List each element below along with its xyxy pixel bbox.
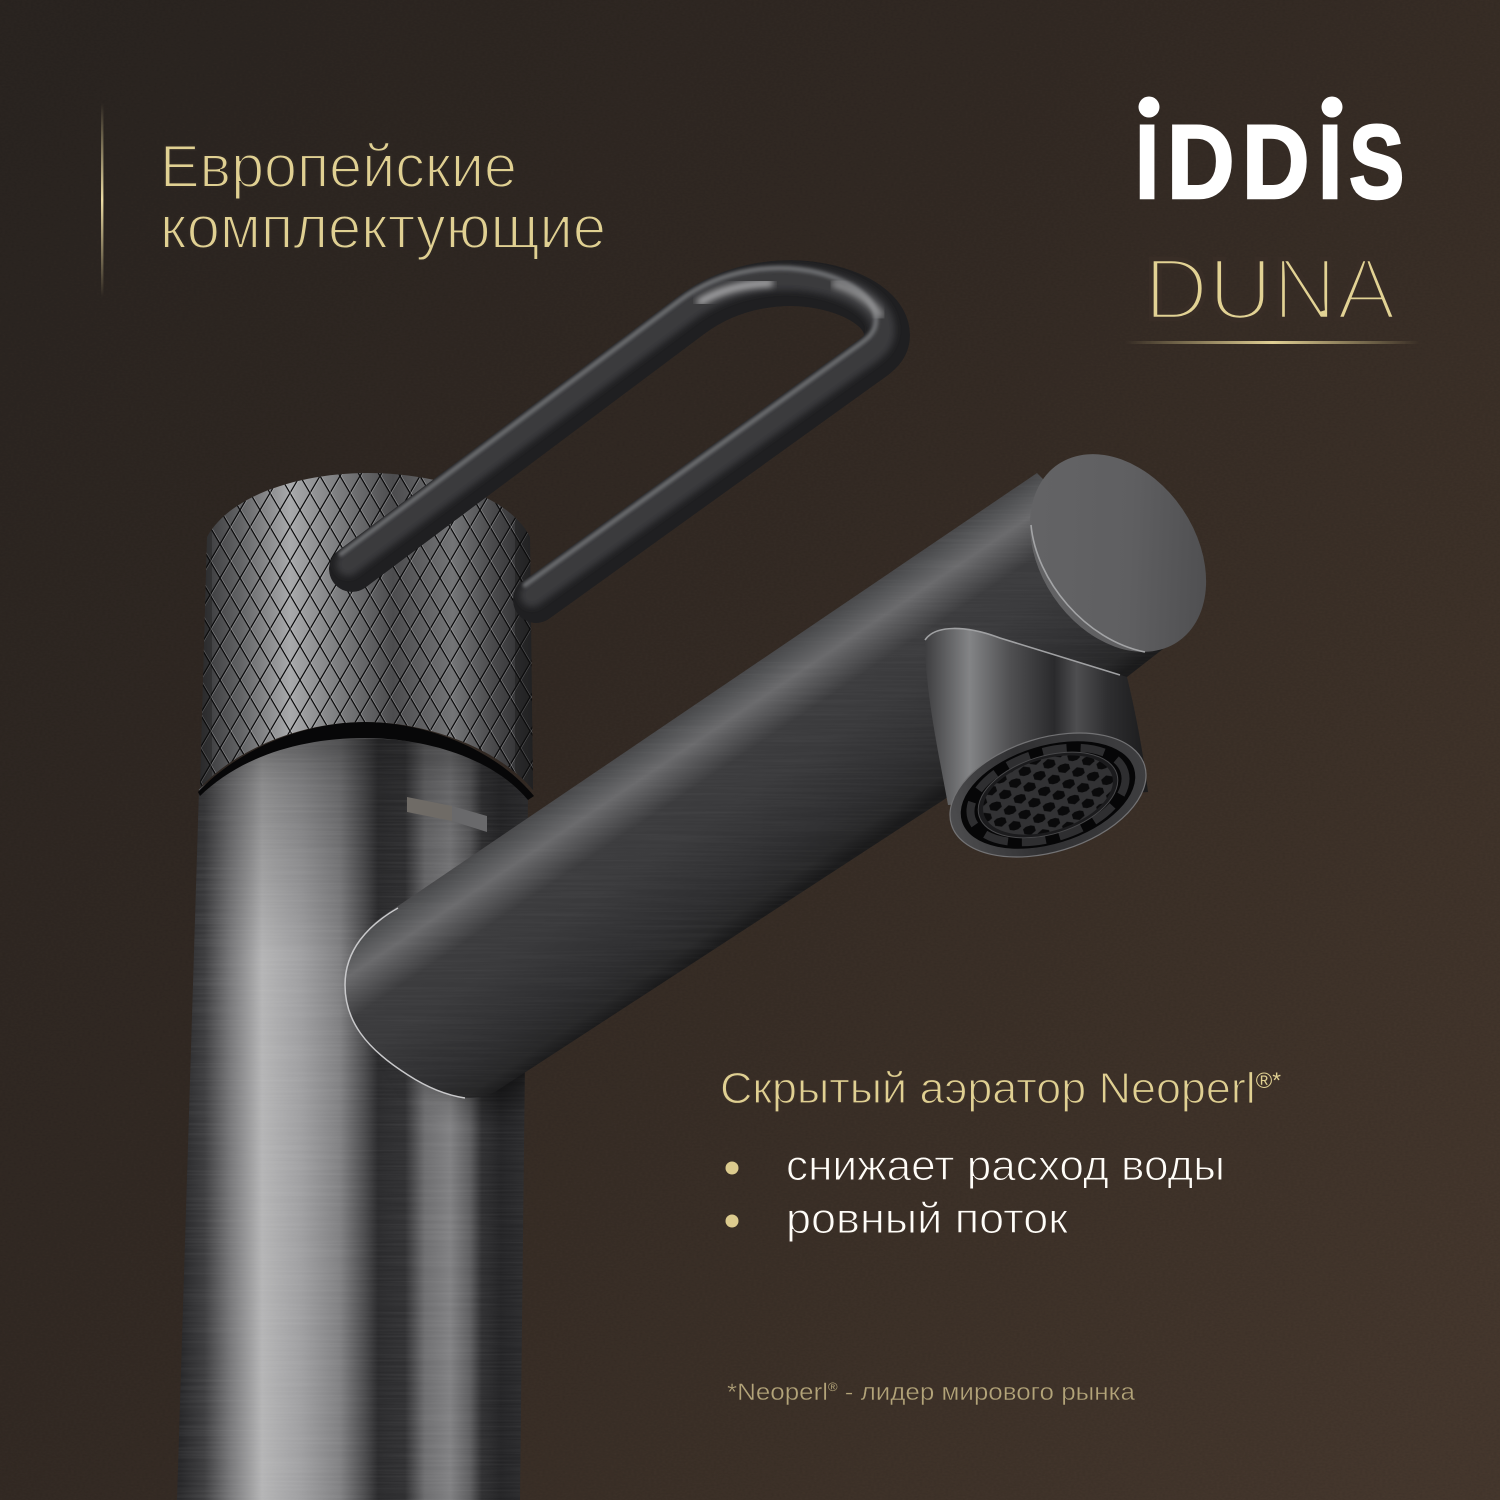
faucet body column bbox=[177, 738, 528, 1500]
footnote: *Neoperl bbox=[727, 1379, 820, 1406]
bullet item: even flow: ровный поток bbox=[786, 1195, 1069, 1243]
aerator rim bbox=[935, 711, 1161, 879]
bullet item: reduces water use: снижает расход воды bbox=[786, 1142, 1225, 1190]
faucet product illustration bbox=[170, 268, 1242, 1500]
aerator ring edge bbox=[968, 737, 1128, 853]
brand logo: IDDIS: D bbox=[1242, 104, 1309, 221]
control mark on body bbox=[407, 797, 487, 832]
bullet list bbox=[726, 1142, 1225, 1243]
handle specular highlight, left of bend bbox=[700, 283, 770, 302]
feature heading: hidden Neoperl aerator: ®* bbox=[1256, 1068, 1281, 1093]
aerator honeycomb mesh bbox=[973, 741, 1123, 849]
footnote: ® bbox=[828, 1380, 838, 1394]
gold rule under series name bbox=[1125, 341, 1420, 344]
spout end disc bbox=[994, 421, 1242, 685]
aerator neck bbox=[925, 628, 1148, 805]
heading: European components: Европейские bbox=[160, 133, 517, 200]
spout bbox=[340, 460, 1210, 1100]
heading: European components: комплектующие bbox=[160, 194, 606, 261]
lever handle loop bbox=[341, 268, 887, 600]
aerator outlet bbox=[935, 711, 1161, 879]
series name: DUNA: DUNA bbox=[1144, 241, 1396, 338]
aerator cavity bbox=[948, 722, 1148, 868]
brand logo: IDDIS: S bbox=[1349, 104, 1404, 221]
heading: European components bbox=[160, 133, 606, 261]
decorative vertical gold rule bbox=[101, 103, 103, 297]
brand logo: IDDIS: I bbox=[1318, 104, 1342, 221]
knurled handle cap bbox=[200, 473, 533, 790]
brand logo: IDDIS: D bbox=[1167, 104, 1234, 221]
handle specular highlight, right of bend bbox=[835, 284, 880, 315]
dark gap below knurled cap bbox=[198, 722, 534, 800]
feature heading: hidden Neoperl aerator: Скрытый аэратор Neoperl bbox=[720, 1064, 1246, 1113]
footnote: - лидер мирового рынка bbox=[838, 1379, 1136, 1406]
aerator toothed ring bbox=[959, 730, 1137, 860]
brand logo: IDDIS bbox=[1135, 96, 1404, 221]
brand logo: IDDIS: I bbox=[1135, 104, 1159, 221]
